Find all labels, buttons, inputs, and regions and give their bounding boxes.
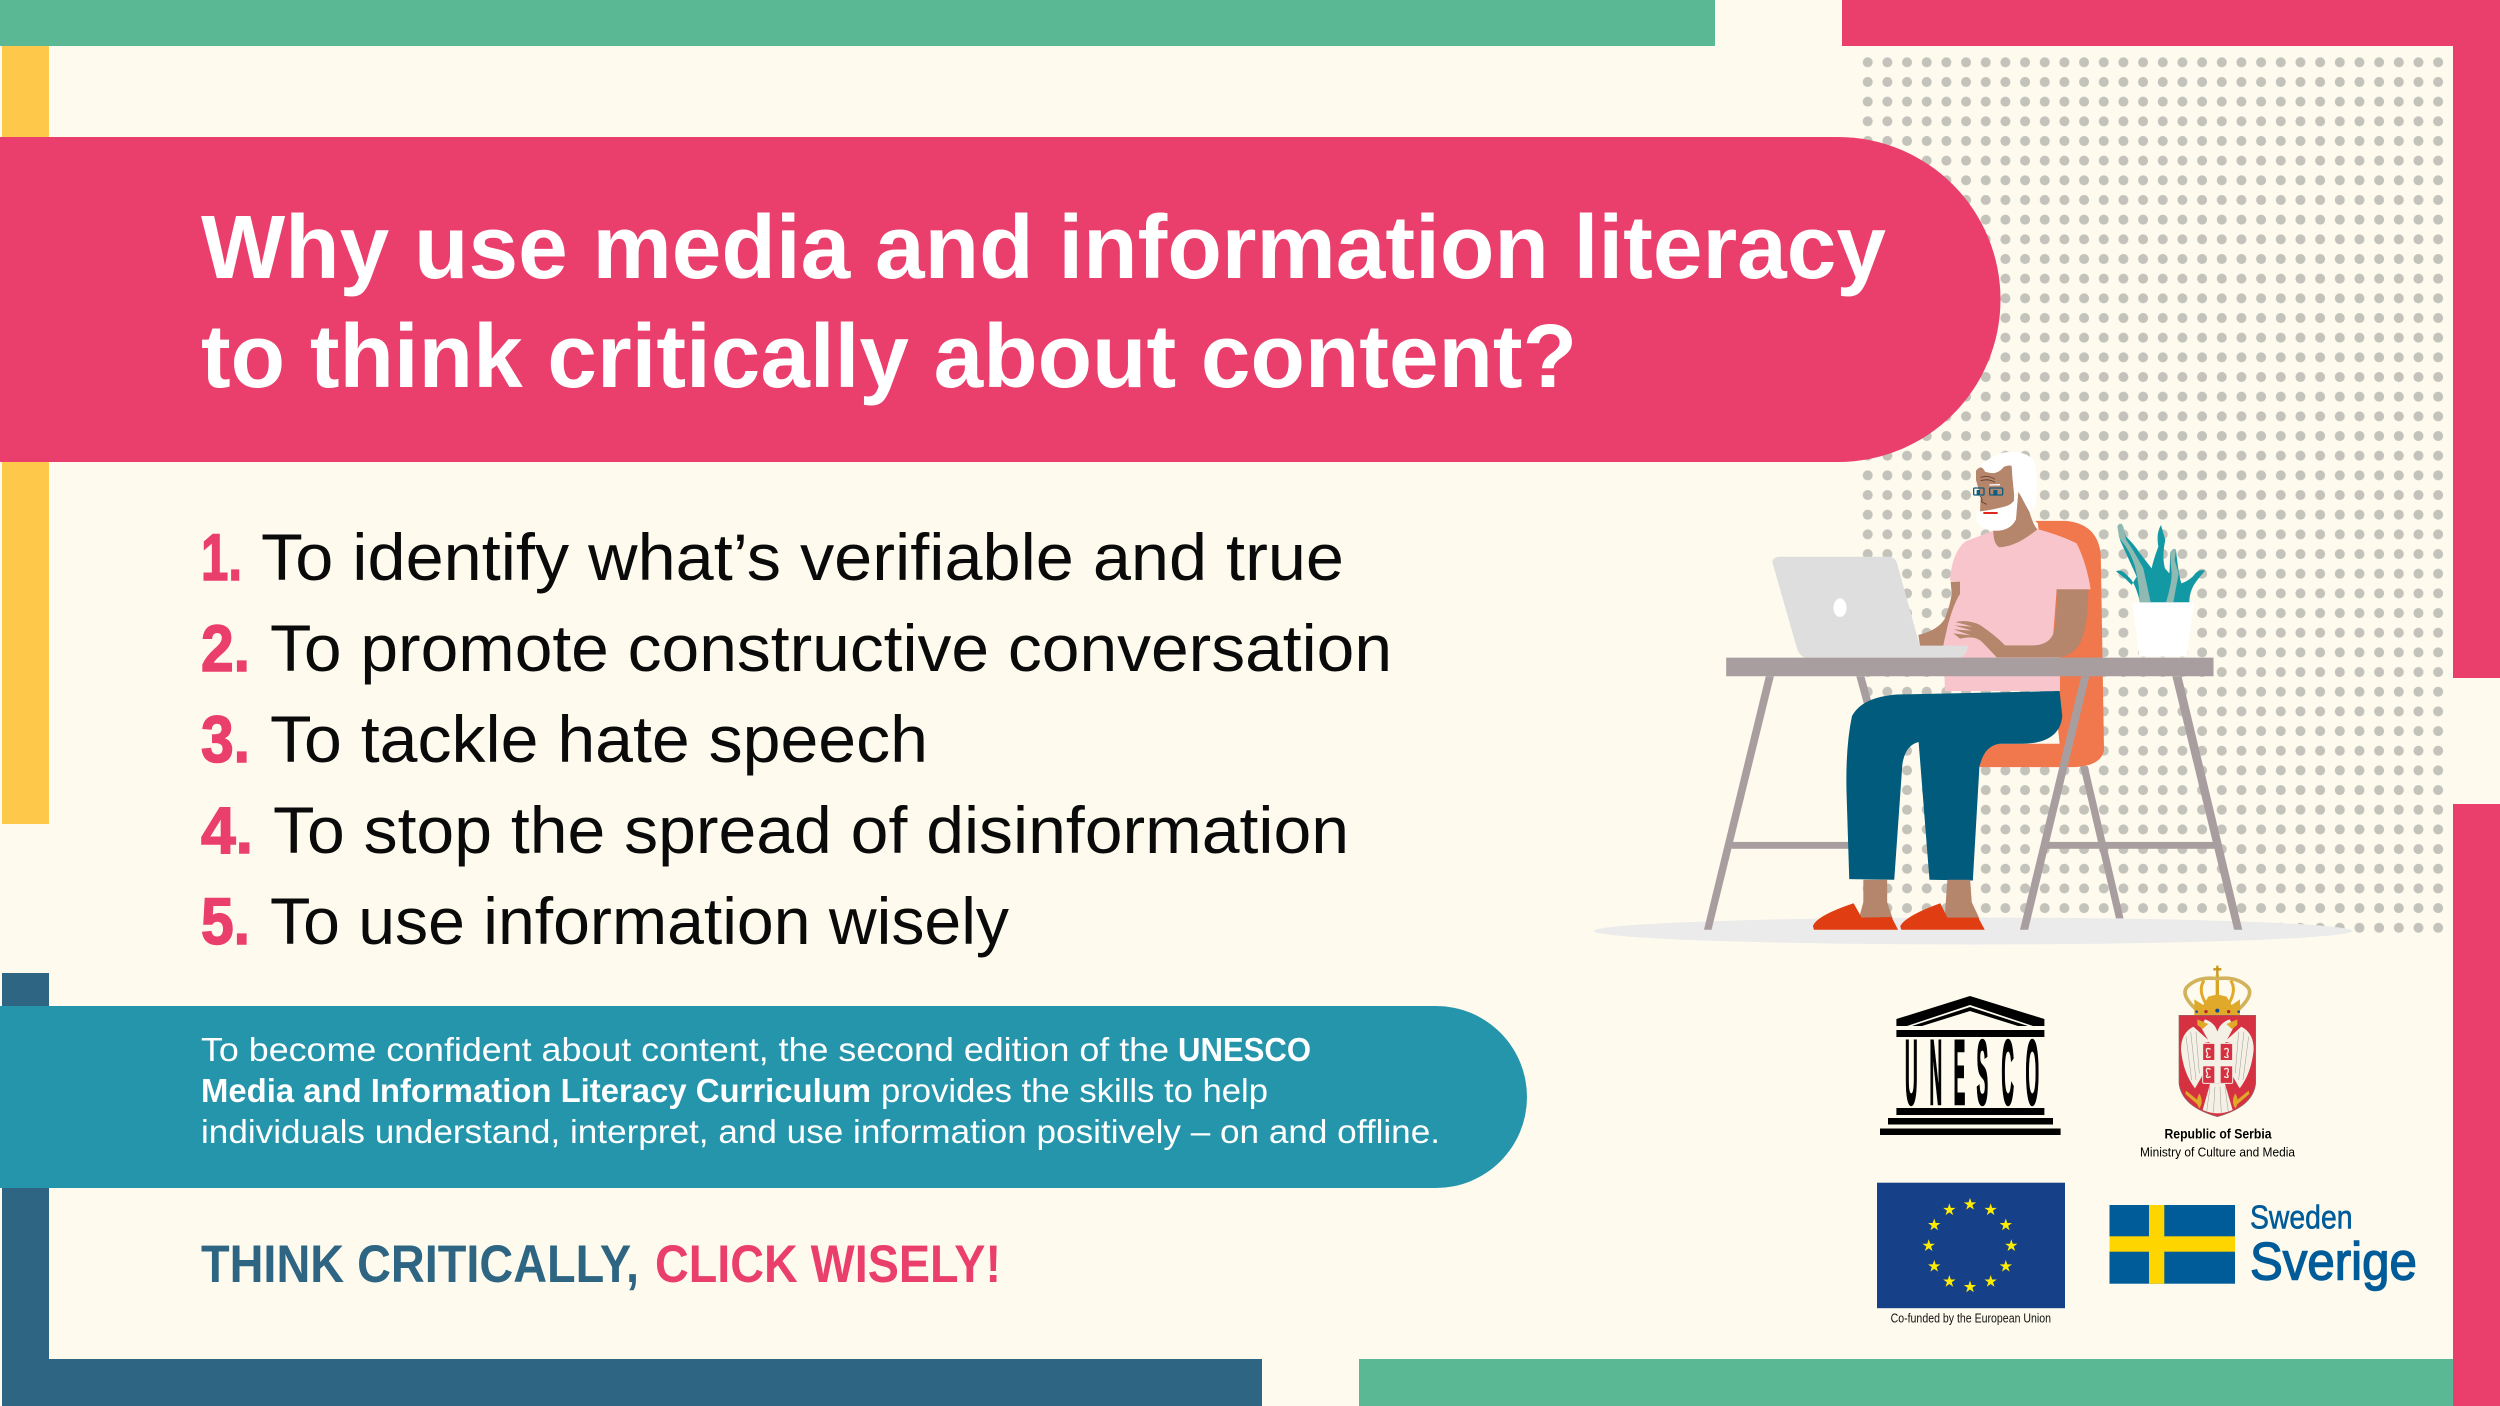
coat of arms — [2179, 966, 2256, 1117]
logo: UNESCO: UNESCO — [1905, 1022, 2039, 1125]
EU caption: Co-funded by the European Union — [1891, 1312, 2051, 1326]
callout text: individuals understand, interpret, and use information positively – on and offline. — [201, 1114, 1440, 1151]
ministry caption: Republic of Serbia — [2164, 1127, 2272, 1142]
callout text: provides the skills to help — [881, 1073, 1268, 1110]
ministry caption: Ministry of Culture and Media — [2140, 1145, 2296, 1160]
list item 5: To use information wisely — [270, 884, 1009, 958]
ankles — [1859, 880, 1979, 918]
list item 1: To identify what’s verifiable and true — [261, 520, 1344, 594]
heading — [201, 198, 1886, 407]
numbered list — [201, 520, 1392, 958]
ring of stars — [1923, 1198, 2017, 1292]
pink t-shirt — [1943, 528, 2091, 691]
list item 2: 2. — [201, 611, 250, 685]
head with white hair, beard and glasses — [1974, 452, 2037, 547]
dotted background pattern — [1858, 52, 2448, 938]
table front legs — [1704, 676, 2242, 930]
near arm and hand — [1953, 589, 2088, 657]
list item 3: 3. — [201, 702, 250, 776]
slippers — [1813, 903, 1985, 930]
list item 5: 5. — [201, 884, 250, 958]
logo: UNESCO — [1880, 996, 2061, 1135]
tagline: CLICK WISELY! — [655, 1235, 1001, 1294]
table front inner leg — [2020, 676, 2089, 930]
list item 4: To stop the spread of disinformation — [273, 793, 1349, 867]
floor shadow — [1594, 918, 2352, 944]
laptop — [1772, 557, 1968, 658]
callout text: To become confident about content, the second edition of the — [201, 1032, 1169, 1069]
logo: European Union flag — [1877, 1183, 2065, 1326]
logo: Republic of Serbia — [2140, 966, 2296, 1160]
callout text — [201, 1032, 1440, 1151]
logo: Sweden: Sweden — [2250, 1199, 2352, 1236]
list item 3: To tackle hate speech — [270, 702, 928, 776]
tagline: THINK CRITICALLY, — [201, 1235, 639, 1294]
table crossbars — [1732, 842, 2217, 849]
chair back leg — [2080, 766, 2124, 918]
list item 1: 1. — [201, 520, 242, 594]
list item 4: 4. — [201, 793, 253, 867]
heading: Why use media and information literacy — [201, 198, 1886, 298]
list item 2: To promote constructive conversation — [270, 611, 1392, 685]
trousers — [1846, 691, 2062, 880]
far arm — [1918, 582, 1960, 646]
potted plant — [2116, 523, 2205, 657]
table back leg — [1856, 676, 1873, 706]
callout text: UNESCO — [1178, 1032, 1311, 1069]
logo: Sweden — [2110, 1199, 2417, 1291]
chair — [1980, 521, 2104, 767]
ministry caption — [2140, 1127, 2296, 1160]
callout text: Media and Information Literacy Curriculum — [201, 1073, 871, 1110]
logo: Sweden: Sverige — [2250, 1232, 2417, 1291]
torso and arms — [1918, 528, 2091, 691]
heading: to think critically about content? — [201, 307, 1577, 407]
illustration: man working at laptop — [1594, 452, 2352, 944]
table top — [1726, 658, 2214, 676]
panel: curriculum callout — [0, 1006, 1527, 1188]
tagline — [201, 1235, 1001, 1294]
panel: title banner — [0, 137, 2000, 462]
